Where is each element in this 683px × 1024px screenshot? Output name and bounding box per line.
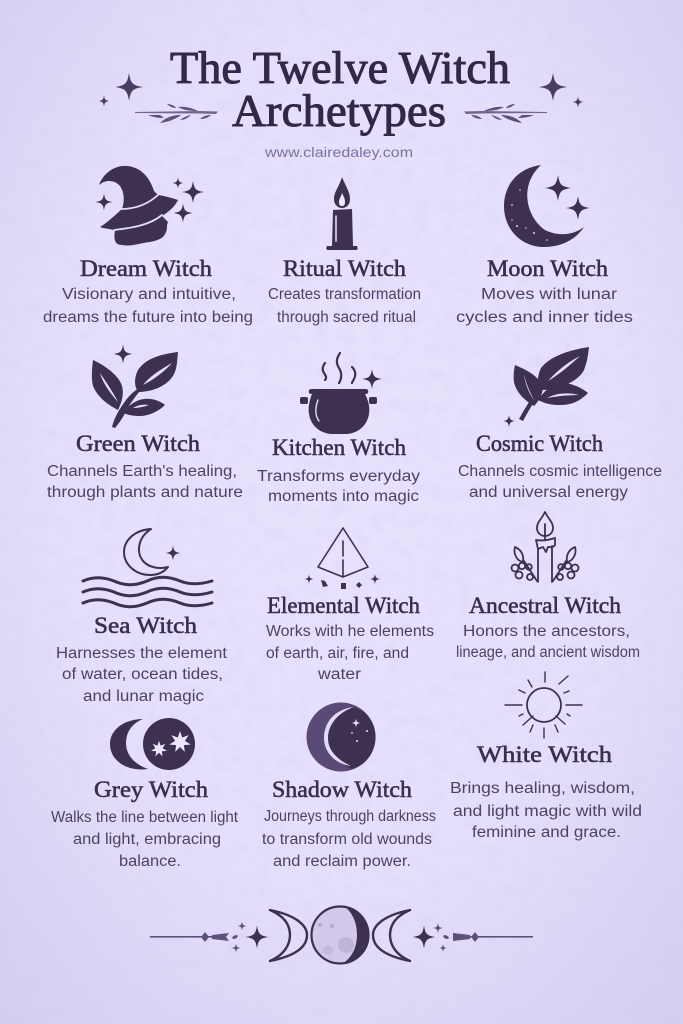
description: cycles and inner tides [456, 309, 633, 326]
panel: Ancestral Witch [456, 512, 640, 661]
icon: sun [505, 672, 582, 738]
left crescent [270, 910, 307, 961]
heading: Sea Witch [94, 613, 198, 638]
description: and light, embracing [73, 831, 221, 848]
panel: Elemental Witch [266, 528, 434, 683]
icon: leaves and sparkle [92, 344, 178, 428]
left line ornament [150, 922, 268, 952]
description: and reclaim power. [273, 853, 411, 870]
panel: Moon Witch [456, 165, 633, 326]
heading: Kitchen Witch [272, 435, 406, 460]
description [56, 645, 228, 705]
icon: pyramid with element symbols [304, 528, 380, 589]
description: Walks the line between light [51, 809, 239, 826]
heading: Cosmic Witch [476, 431, 603, 456]
description: Harnesses the element [56, 645, 228, 662]
icon: crescent over waves [83, 529, 212, 607]
website url: www.clairedaley.com [264, 144, 413, 160]
description: of earth, air, fire, and [266, 645, 409, 662]
description: of water, ocean tides, [62, 666, 223, 683]
panel: Green Witch [47, 344, 243, 501]
description: dreams the future into being [43, 309, 253, 326]
description: Works with he elements [266, 623, 434, 640]
heading: Elemental Witch [267, 593, 420, 618]
full moon [312, 906, 369, 964]
description: moments into magic [268, 488, 419, 505]
description: balance. [119, 853, 181, 870]
description [43, 286, 253, 326]
header [98, 42, 584, 160]
heading: White Witch [477, 742, 613, 767]
description: through sacred ritual [277, 309, 416, 326]
icon: cauldron with steam [300, 353, 382, 434]
description [458, 463, 662, 501]
description [450, 780, 642, 841]
panel: Sea Witch [56, 529, 228, 705]
description [268, 286, 421, 326]
description: Transforms everyday [257, 468, 420, 485]
icon: candle with botanical sprigs [512, 512, 578, 582]
description [51, 809, 239, 870]
description: Creates transformation [268, 286, 421, 303]
panel: Cosmic Witch [458, 347, 662, 501]
description: Brings healing, wisdom, [450, 780, 635, 797]
right line ornament [412, 923, 533, 952]
description: Visionary and intuitive, [62, 286, 236, 303]
icon: crescent moon and stars [504, 165, 590, 247]
title [170, 42, 510, 136]
description: through plants and nature [47, 484, 243, 501]
panel: Ritual Witch [268, 177, 421, 326]
left header sparkles [98, 73, 143, 106]
panel: Kitchen Witch [257, 353, 420, 505]
description: Channels Earth's healing, [47, 463, 237, 480]
panel: White Witch [450, 672, 642, 841]
description: to transform old wounds [262, 831, 432, 848]
description: Honors the ancestors, [463, 623, 630, 640]
heading: Moon Witch [487, 256, 609, 281]
heading: Grey Witch [94, 777, 209, 802]
description [262, 808, 436, 870]
icon: shadow moon [306, 702, 376, 772]
icon: leaves and small sparkle [503, 347, 589, 427]
description: and light magic with wild [453, 803, 642, 820]
triple moon footer ornament [150, 906, 533, 964]
description: feminine and grace. [472, 824, 621, 841]
description: Journeys through darkness [264, 808, 436, 825]
heading: Dream Witch [80, 256, 213, 281]
description: and lunar magic [83, 688, 204, 705]
heading: Ancestral Witch [469, 593, 621, 618]
description [47, 463, 243, 501]
description [456, 623, 640, 661]
title: Archetypes [232, 85, 446, 136]
icon: crescent and starry moon [110, 718, 195, 770]
panel: Dream Witch [43, 166, 253, 326]
description: water [317, 666, 361, 683]
description: and universal energy [469, 484, 628, 501]
title: The Twelve Witch [170, 42, 510, 93]
heading: Shadow Witch [272, 777, 413, 802]
panel: Grey Witch [51, 718, 239, 870]
heading: Green Witch [76, 431, 201, 456]
right crescent [373, 910, 410, 961]
right laurel flourish [464, 104, 547, 123]
panel: Shadow Witch [262, 702, 436, 870]
description: lineage, and ancient wisdom [456, 644, 640, 661]
icon: witch hat with sparkles [96, 166, 204, 246]
left laurel flourish [135, 104, 218, 123]
description: Channels cosmic intelligence [458, 463, 662, 480]
description [257, 468, 420, 505]
description [266, 623, 434, 683]
heading: Ritual Witch [283, 256, 407, 281]
description: Moves with lunar [481, 286, 617, 303]
icon: candle [326, 177, 358, 250]
right header sparkles [539, 73, 584, 108]
description [456, 286, 633, 326]
